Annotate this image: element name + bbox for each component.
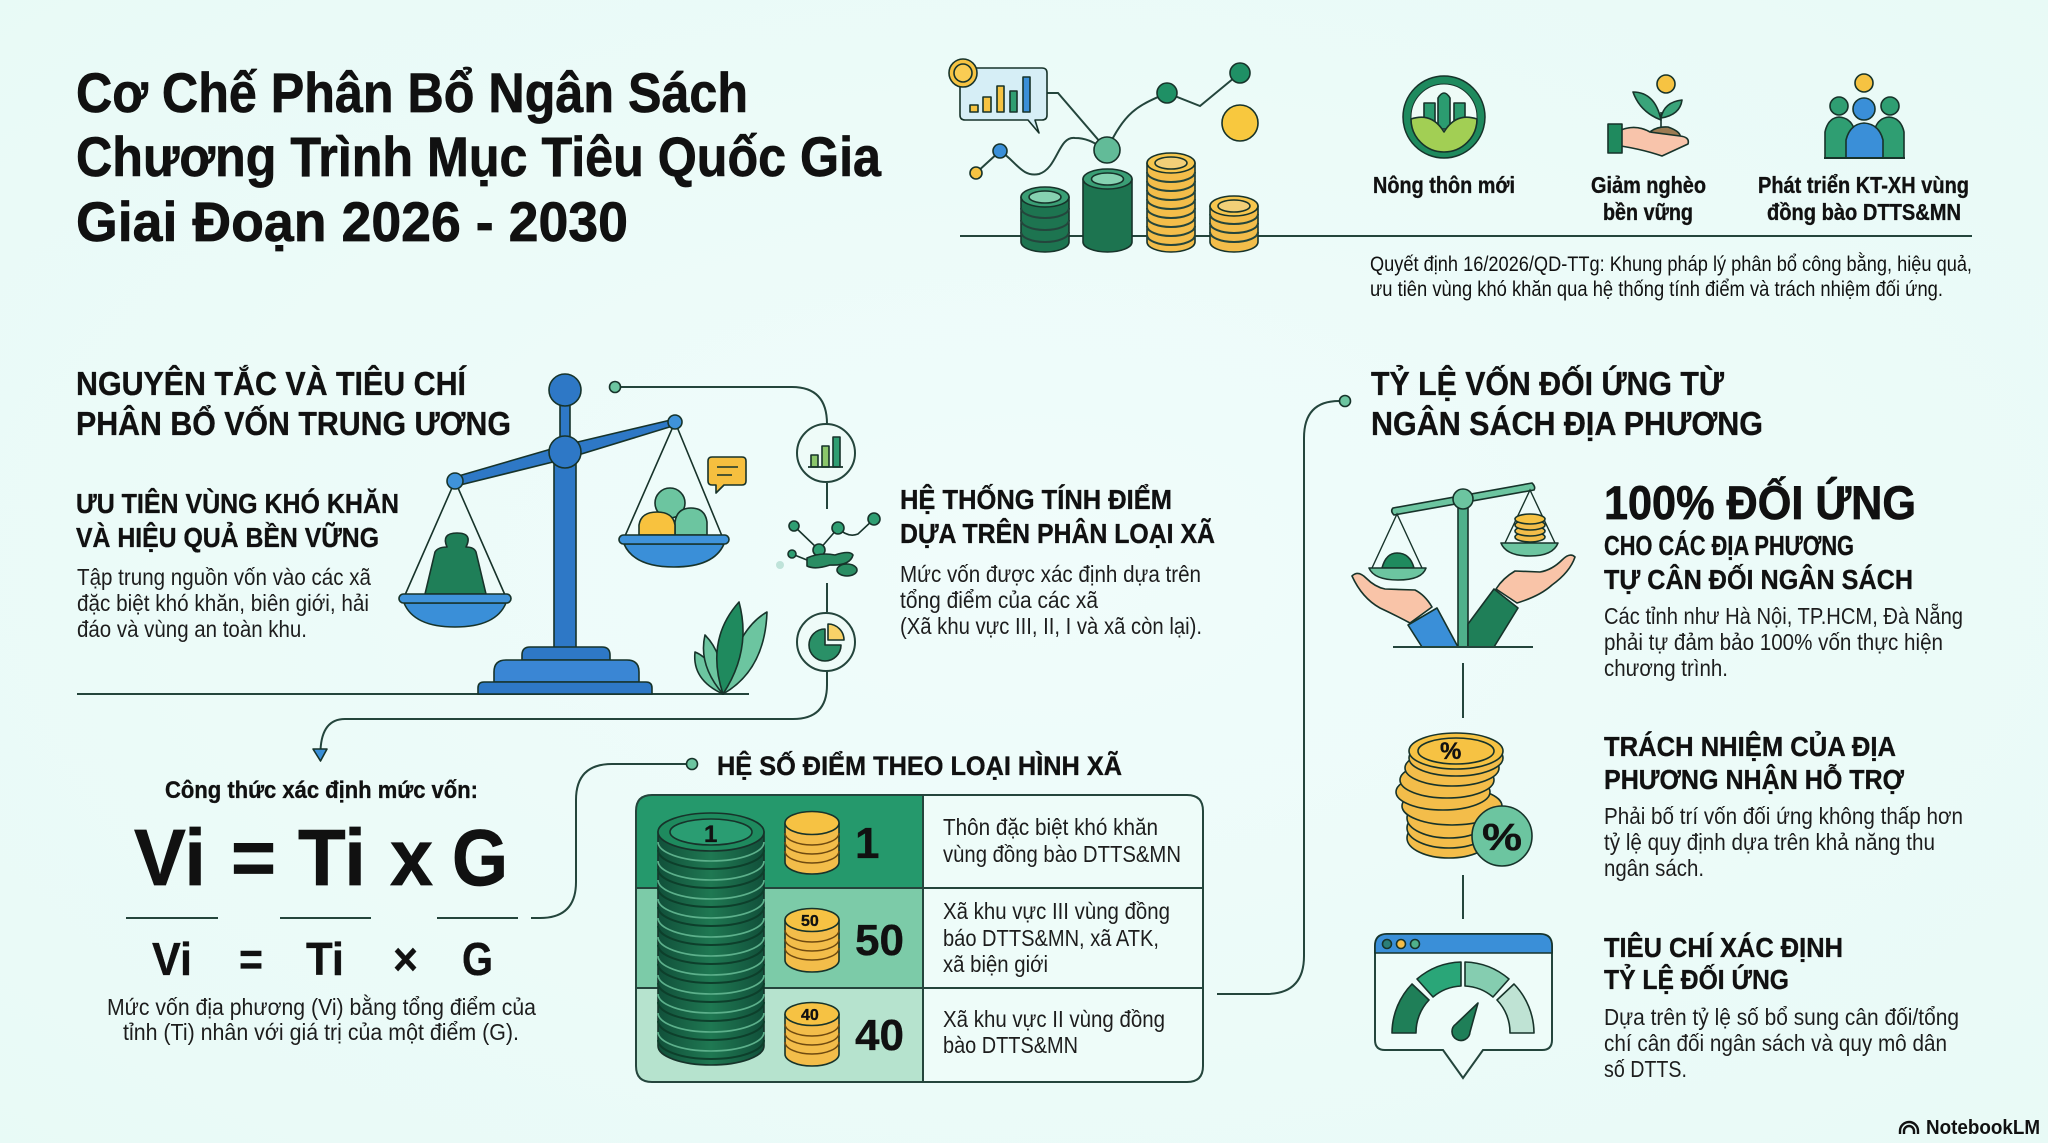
text: self-balancing description: phải tự đảm bảo 100% vốn thực hiện bbox=[1604, 629, 1943, 655]
formula caption: Công thức xác định mức vốn: bbox=[165, 777, 478, 804]
formula: breakdown: × bbox=[393, 933, 418, 985]
right pan bbox=[619, 422, 729, 567]
heading: allocation principles: NGUYÊN TẮC VÀ TIÊU CHÍ bbox=[76, 365, 467, 402]
subheading: priority regions: VÀ HIỆU QUẢ BỀN VỮNG bbox=[76, 521, 379, 553]
heading: allocation principles bbox=[76, 365, 511, 442]
watermark: NotebookLM: NotebookLM bbox=[1926, 1117, 2040, 1139]
label: poverty reduction: Giảm nghèo bbox=[1591, 172, 1706, 198]
label: rural development: Nông thôn mới bbox=[1373, 172, 1515, 198]
row 3 description: Xã khu vực II vùng đồng bbox=[943, 1006, 1165, 1032]
text: priority regions description: đáo và vùng an toàn khu. bbox=[77, 616, 307, 642]
connector dot bbox=[1340, 396, 1350, 406]
chart line bbox=[1047, 73, 1240, 150]
illustration: hands with scale bbox=[1352, 483, 1575, 647]
formula explanation: Mức vốn địa phương (Vi) bằng tổng điểm của bbox=[107, 994, 536, 1020]
coins: row 2: 50 bbox=[801, 913, 819, 930]
illustration: balance scale bbox=[399, 374, 729, 694]
label: ethnic minority development bbox=[1758, 172, 1969, 225]
formula: large: x bbox=[390, 813, 433, 902]
decision note bbox=[1370, 253, 1972, 301]
heading: coefficient table: HỆ SỐ ĐIỂM THEO LOẠI HÌNH XÃ bbox=[717, 749, 1122, 781]
formula: breakdown: = bbox=[239, 933, 263, 985]
subheading: self-balancing localities: CHO CÁC ĐỊA PHƯƠNG bbox=[1604, 530, 1854, 561]
text: responsibility description: tỷ lệ quy định dựa trên khả năng thu bbox=[1604, 829, 1935, 855]
heading: counterpart funding bbox=[1371, 364, 1763, 442]
subheading: self-balancing localities bbox=[1604, 530, 1913, 595]
icon: gauge window bbox=[1375, 934, 1552, 1078]
title: Giai Đoạn 2026 - 2030 bbox=[76, 190, 628, 253]
title: Cơ Chế Phân Bổ Ngân Sách bbox=[76, 61, 748, 124]
heading: 100% counterpart: 100% ĐỐI ỨNG bbox=[1604, 476, 1916, 529]
coin stack 4 bbox=[1210, 196, 1258, 252]
text: criteria description: chí cân đối ngân sách và quy mô dân bbox=[1604, 1030, 1947, 1056]
connector: table to counterpart funding bbox=[1217, 401, 1339, 994]
heading: point system: HỆ THỐNG TÍNH ĐIỂM bbox=[900, 483, 1172, 515]
heading: counterpart funding: NGÂN SÁCH ĐỊA PHƯƠNG bbox=[1371, 405, 1763, 442]
row 2 description bbox=[943, 898, 1170, 977]
formula: large: Ti bbox=[298, 813, 366, 902]
vertical connectors bbox=[1462, 663, 1464, 919]
text: responsibility description bbox=[1604, 803, 1963, 881]
coin stack 1 bbox=[1021, 187, 1069, 252]
heading: recipient responsibility bbox=[1604, 730, 1904, 795]
arrow head to formula bbox=[313, 749, 327, 761]
heading: recipient responsibility: TRÁCH NHIỆM CỦA ĐỊA bbox=[1604, 730, 1896, 762]
text: responsibility description: ngân sách. bbox=[1604, 855, 1704, 881]
row 3 description bbox=[943, 1006, 1165, 1058]
icon: chat bubble bbox=[708, 457, 746, 493]
formula: large: Vi bbox=[134, 813, 206, 902]
formula rules bbox=[126, 917, 518, 919]
chat bubble chart bbox=[949, 59, 1047, 133]
row 2 description: báo DTTS&MN, xã ATK, bbox=[943, 925, 1159, 951]
row 1 description bbox=[943, 814, 1181, 867]
coins: row 3 bbox=[785, 1002, 839, 1066]
formula explanation bbox=[107, 994, 536, 1045]
text: point system description: Mức vốn được xác định dựa trên bbox=[900, 561, 1201, 587]
table: points by commune type bbox=[636, 795, 1203, 1082]
title: Chương Trình Mục Tiêu Quốc Gia bbox=[76, 125, 882, 188]
table rows background bbox=[636, 795, 1203, 1082]
value: 50: 50 bbox=[855, 916, 904, 965]
formula: breakdown: Vi bbox=[152, 933, 192, 985]
text: responsibility description: Phải bố trí vốn đối ứng không thấp hơn bbox=[1604, 803, 1963, 829]
row 1 description: Thôn đặc biệt khó khăn bbox=[943, 814, 1158, 840]
formula explanation: tỉnh (Ti) nhân với giá trị của một điểm (G). bbox=[123, 1019, 519, 1045]
formula: large: G bbox=[452, 813, 508, 902]
icon: coins with percent bbox=[1396, 733, 1532, 866]
heading: counterpart ratio criteria: TIÊU CHÍ XÁC ĐỊNH bbox=[1604, 932, 1843, 963]
heading: point system bbox=[900, 483, 1215, 549]
coins: row 1 bbox=[785, 812, 839, 874]
text: criteria description: số DTTS. bbox=[1604, 1056, 1687, 1082]
subheading: priority regions bbox=[76, 488, 399, 553]
text: self-balancing description: Các tỉnh như Hà Nội, TP.HCM, Đà Nẵng bbox=[1604, 602, 1963, 629]
coins: row 2 bbox=[785, 908, 839, 972]
connector start dot bbox=[610, 382, 620, 392]
post and beam bbox=[554, 400, 576, 650]
text: point system description bbox=[900, 561, 1202, 639]
row 3 description: bào DTTS&MN bbox=[943, 1032, 1078, 1058]
tall coin stack: 1 bbox=[704, 821, 717, 848]
formula: breakdown bbox=[152, 933, 493, 985]
base bbox=[522, 647, 610, 660]
decision note: ưu tiên vùng khó khăn qua hệ thống tính điểm và trách nhiệm đối ứng. bbox=[1370, 278, 1943, 301]
text: priority regions description bbox=[77, 564, 371, 642]
text: priority regions description: Tập trung nguồn vốn vào các xã bbox=[77, 564, 371, 590]
tall coin stack bbox=[658, 813, 764, 1065]
connector end dot bbox=[686, 758, 698, 770]
heading: counterpart ratio criteria: TỶ LỆ ĐỐI ỨNG bbox=[1604, 963, 1789, 995]
label: ethnic minority development: Phát triển KT-XH vùng bbox=[1758, 172, 1969, 198]
connector: scale to formula bbox=[320, 387, 827, 750]
text: point system description: (Xã khu vực III, II, I và xã còn lại). bbox=[900, 613, 1202, 639]
text: criteria description bbox=[1604, 1004, 1959, 1082]
heading: point system: DỰA TRÊN PHÂN LOẠI XÃ bbox=[900, 518, 1215, 549]
heading: counterpart funding: TỶ LỆ VỐN ĐỐI ỨNG TỪ bbox=[1371, 364, 1725, 402]
row 2 description: Xã khu vực III vùng đồng bbox=[943, 898, 1170, 924]
left pan bbox=[399, 481, 511, 627]
value: 1: 1 bbox=[855, 819, 879, 868]
subheading: priority regions: ƯU TIÊN VÙNG KHÓ KHĂN bbox=[76, 488, 399, 519]
text: priority regions description: đặc biệt khó khăn, biên giới, hải bbox=[77, 590, 369, 616]
coins: row 3: 40 bbox=[801, 1007, 819, 1024]
icon: coins with percent: % bbox=[1482, 817, 1522, 859]
icon: bar chart circle bbox=[797, 424, 855, 482]
value: 40: 40 bbox=[855, 1011, 904, 1060]
heading: recipient responsibility: PHƯƠNG NHẬN HỖ TRỢ bbox=[1604, 764, 1904, 795]
formula: large: = bbox=[231, 813, 276, 902]
text: point system description: tổng điểm của các xã bbox=[900, 587, 1098, 613]
heading: allocation principles: PHÂN BỔ VỐN TRUNG ƯƠNG bbox=[76, 404, 511, 442]
ground line bbox=[77, 693, 749, 695]
label: poverty reduction bbox=[1591, 172, 1706, 225]
coin stack 3 bbox=[1147, 153, 1195, 252]
decision note: Quyết định 16/2026/QD-TTg: Khung pháp lý phân bổ công bằng, hiệu quả, bbox=[1370, 253, 1972, 276]
text: self-balancing description bbox=[1604, 602, 1963, 681]
text: criteria description: Dựa trên tỷ lệ số bổ sung cân đối/tổng bbox=[1604, 1004, 1959, 1030]
formula: breakdown: Ti bbox=[306, 933, 344, 985]
icon: plant bbox=[695, 602, 767, 694]
icon: hand holding seedling bbox=[1608, 75, 1688, 156]
row 1 description: vùng đồng bào DTTS&MN bbox=[943, 841, 1181, 867]
coin stack 2 bbox=[1083, 169, 1132, 252]
text: self-balancing description: chương trình. bbox=[1604, 655, 1728, 681]
formula: large bbox=[134, 813, 508, 902]
icon: pie chart circle bbox=[797, 613, 855, 671]
row 2 description: xã biện giới bbox=[943, 951, 1048, 977]
icon: coins with percent: % bbox=[1440, 738, 1461, 765]
title bbox=[76, 61, 882, 253]
icon: community group bbox=[1824, 74, 1905, 158]
formula: breakdown: G bbox=[462, 933, 493, 985]
icon: network nodes bbox=[776, 513, 880, 576]
connector: formula to table bbox=[531, 764, 686, 918]
heading: counterpart ratio criteria bbox=[1604, 932, 1843, 995]
icon: rural development bbox=[1403, 76, 1485, 158]
illustration: coins and growth chart bbox=[949, 59, 1258, 252]
label: ethnic minority development: đồng bào DTTS&MN bbox=[1767, 199, 1961, 225]
subheading: self-balancing localities: TỰ CÂN ĐỐI NGÂN SÁCH bbox=[1604, 563, 1913, 595]
header divider line bbox=[960, 235, 1972, 237]
label: poverty reduction: bền vững bbox=[1603, 199, 1693, 225]
